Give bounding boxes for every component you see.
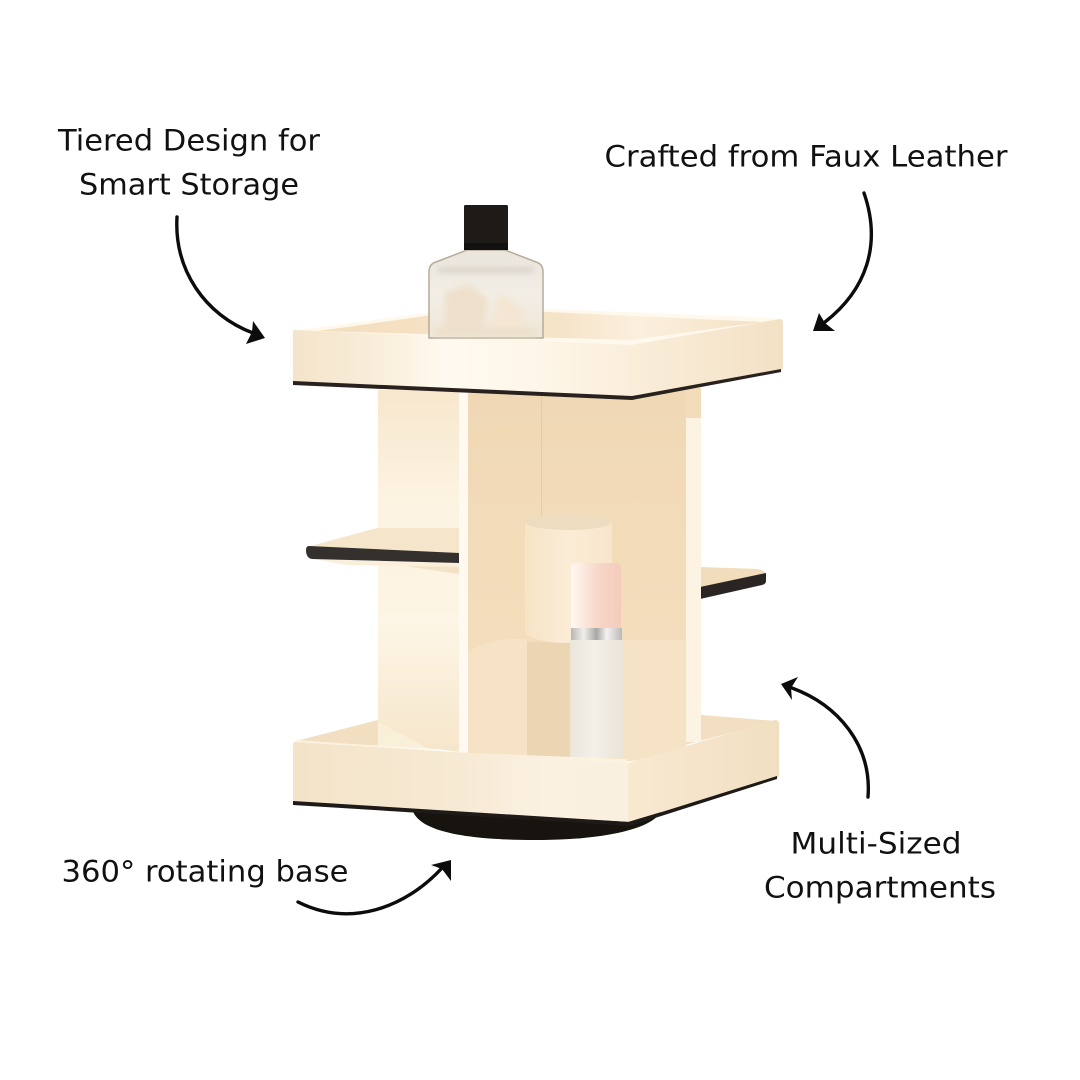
pink bottle [570,563,623,758]
heading: tiered design [57,124,320,202]
top tray [292,309,783,400]
bottom tray [293,720,779,826]
product: rotating organizer [292,205,783,840]
bottom tray interior [296,715,776,760]
back wall [468,390,686,762]
heading: compartments: Multi-Sized [790,826,962,860]
arrow: compartments [781,677,868,797]
perfume bottle [429,205,543,338]
heading: tiered design: Smart Storage [79,168,299,202]
white divider [459,390,468,753]
cream cylinder [525,514,612,643]
bottom tray interior light corner [378,722,430,749]
arrow: tiered design [177,217,265,344]
left column [378,390,460,752]
heading: compartments: Compartments [764,870,996,904]
arrow: faux leather [813,193,871,331]
heading: tiered design: Tiered Design for [57,124,320,158]
rotating base disc [412,808,662,840]
heading: faux leather: Crafted from Faux Leather [604,140,1008,174]
heading: compartments [764,826,996,904]
right edge strip [686,388,701,742]
left shelf [306,528,459,574]
heading: rotating base: 360° rotating base [62,854,348,888]
right shelf [700,567,766,599]
reflection under cylinder [527,642,571,758]
arrow: rotating base [298,860,451,914]
